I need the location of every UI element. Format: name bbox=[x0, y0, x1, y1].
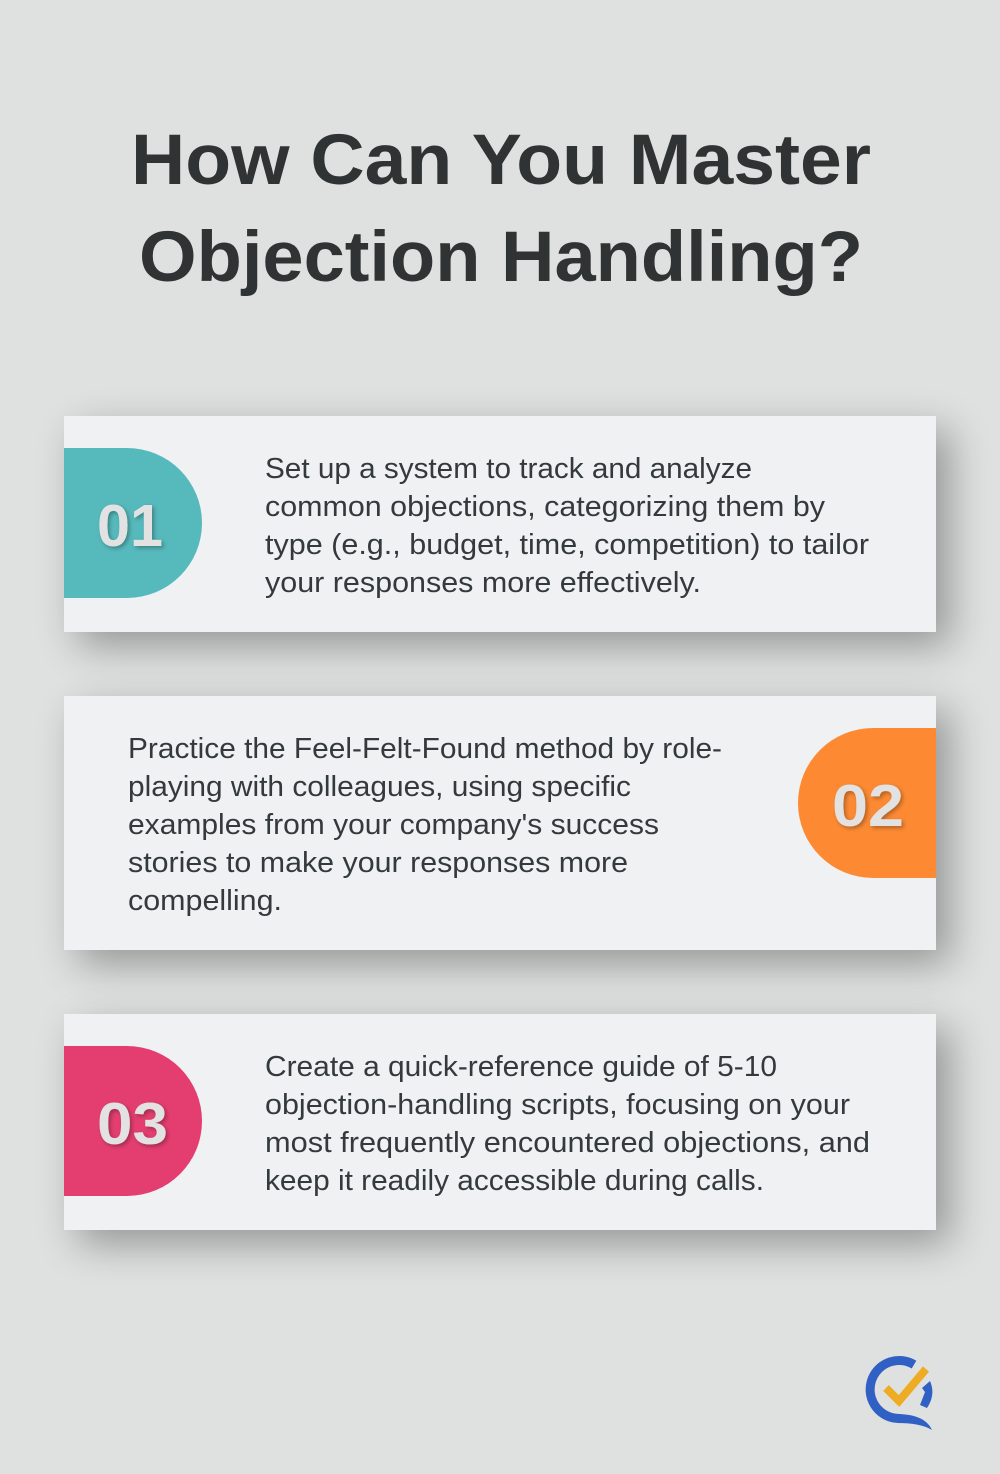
badge: 01: 01 bbox=[97, 493, 163, 559]
badge: 02: 02 bbox=[832, 773, 904, 839]
icon: logo bbox=[870, 1361, 932, 1430]
text: step 03: keep it readily accessible during calls. bbox=[265, 1165, 764, 1197]
text: step 02 bbox=[128, 733, 722, 917]
title: Objection Handling? bbox=[139, 218, 863, 297]
panel: step 02 bbox=[64, 696, 950, 964]
text: step 02: compelling. bbox=[128, 885, 282, 917]
panel: step 03 bbox=[64, 1014, 950, 1244]
text: step 02: playing with colleagues, using specific bbox=[128, 771, 631, 803]
text: step 03: objection-handling scripts, focusing on your bbox=[265, 1089, 850, 1121]
panel: step 01 bbox=[64, 416, 950, 646]
text: step 01 bbox=[265, 453, 869, 599]
text: step 02: stories to make your responses more bbox=[128, 847, 628, 879]
badge: 02 bbox=[798, 728, 936, 878]
title bbox=[131, 121, 871, 297]
text: step 01: type (e.g., budget, time, competition) to tailor bbox=[265, 529, 869, 561]
text: step 03: most frequently encountered objections, and bbox=[265, 1127, 870, 1159]
text: step 02: examples from your company's success bbox=[128, 809, 659, 841]
text: step 03 bbox=[265, 1051, 870, 1197]
text: step 01: your responses more effectively. bbox=[265, 567, 701, 599]
text: step 03: Create a quick-reference guide of 5-10 bbox=[265, 1051, 777, 1083]
badge: 03 bbox=[64, 1046, 202, 1196]
badge: 01 bbox=[64, 448, 202, 598]
title: How Can You Master bbox=[131, 121, 871, 200]
text: step 01: Set up a system to track and analyze bbox=[265, 453, 752, 485]
text: step 01: common objections, categorizing them by bbox=[265, 491, 826, 523]
text: step 02: Practice the Feel-Felt-Found method by role- bbox=[128, 733, 722, 765]
badge: 03: 03 bbox=[97, 1091, 168, 1157]
